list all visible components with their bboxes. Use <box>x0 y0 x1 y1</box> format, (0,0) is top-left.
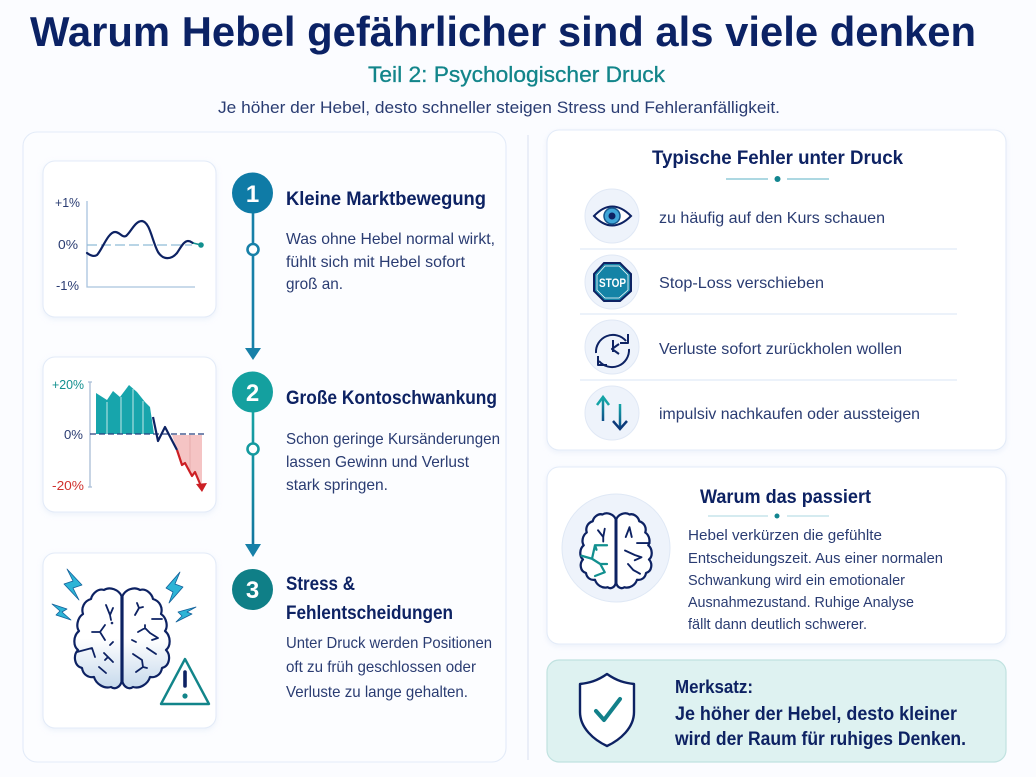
chart card: small market move: +1% <box>55 195 80 210</box>
step 3 heading: Fehlentscheidungen <box>286 602 453 624</box>
icon: shield with check <box>580 674 634 746</box>
tagline: Je höher der Hebel, desto schneller steigen Stress und Fehleranfälligkeit. <box>218 98 780 117</box>
step 2 text: Schon geringe Kursänderungen <box>286 431 500 448</box>
panel heading: Warum das passiert <box>700 487 872 508</box>
step 1 text <box>286 231 495 293</box>
step 2 timeline: 2 <box>246 380 259 407</box>
step 1 text: Was ohne Hebel normal wirkt, <box>286 231 495 248</box>
step 2 text: stark springen. <box>286 477 388 494</box>
step 3 text: oft zu früh geschlossen oder <box>286 659 477 676</box>
chart card: large account swing: -20% <box>52 478 84 493</box>
row text: Stop-Loss verschieben <box>659 275 824 292</box>
step 3 heading <box>286 573 453 624</box>
panel: key takeaway <box>547 660 1006 762</box>
panel text: Schwankung wird ein emotionaler <box>688 573 905 589</box>
row text: Verluste sofort zurückholen wollen <box>659 341 902 358</box>
step 3 heading: Stress & <box>286 573 355 595</box>
step 3 text <box>286 635 492 701</box>
row: stop sign icon <box>585 255 639 309</box>
icon card: stressed brain <box>43 553 216 728</box>
takeaway text: Je höher der Hebel, desto kleiner <box>675 704 958 725</box>
step 3 text: Unter Druck werden Positionen <box>286 635 492 652</box>
chart card: large account swing: 0% <box>64 427 83 442</box>
step 1 timeline <box>232 172 273 360</box>
icon: lightning bolts <box>52 569 196 622</box>
row: stop sign icon: STOP <box>599 276 626 290</box>
step 1 text: groß an. <box>286 276 343 293</box>
step 3 text: Verluste zu lange gehalten. <box>286 684 468 701</box>
panel text: Entscheidungszeit. Aus einer normalen <box>688 551 943 567</box>
row text: zu häufig auf den Kurs schauen <box>659 210 885 227</box>
icon: brain in circle <box>562 494 670 602</box>
step 2 text <box>286 431 500 494</box>
panel text: fällt dann deutlich schwerer. <box>688 617 867 633</box>
panel: why it happens <box>547 467 1006 644</box>
row text: impulsiv nachkaufen oder aussteigen <box>659 406 920 423</box>
step 2 timeline <box>232 372 273 557</box>
panel text: Hebel verkürzen die gefühlte <box>688 528 882 544</box>
step 3 badge: 3 <box>246 577 259 604</box>
step 2 text: lassen Gewinn und Verlust <box>286 454 470 471</box>
title: Warum Hebel gefährlicher sind als viele denken <box>30 8 976 55</box>
takeaway text <box>674 704 966 750</box>
step 2 heading: Große Kontoschwankung <box>286 387 497 409</box>
row: clock icon <box>585 320 639 374</box>
panel heading: Typische Fehler unter Druck <box>652 147 903 169</box>
subtitle: Teil 2: Psychologischer Druck <box>368 62 666 87</box>
row: up-down arrows icon <box>585 386 639 440</box>
icon: warning triangle <box>161 659 209 704</box>
step 3 badge <box>232 569 273 610</box>
panel text <box>688 528 943 633</box>
step 1 heading: Kleine Marktbewegung <box>286 188 486 210</box>
chart card: small market move <box>43 161 216 317</box>
step 1 text: fühlt sich mit Hebel sofort <box>286 254 466 271</box>
icon: brain <box>74 588 170 688</box>
chart card: small market move: -1% <box>56 278 79 293</box>
takeaway label: Merksatz: <box>675 677 753 697</box>
chart card: large account swing <box>43 357 216 512</box>
chart card: small market move: 0% <box>58 237 78 252</box>
panel text: Ausnahmezustand. Ruhige Analyse <box>688 595 914 611</box>
panel: typical errors <box>547 130 1006 450</box>
takeaway text: wird der Raum für ruhiges Denken. <box>674 729 966 750</box>
chart card: large account swing: +20% <box>52 377 84 392</box>
step 1 timeline: 1 <box>246 181 259 208</box>
panel: left process <box>23 132 506 762</box>
row: eye icon <box>585 189 639 243</box>
